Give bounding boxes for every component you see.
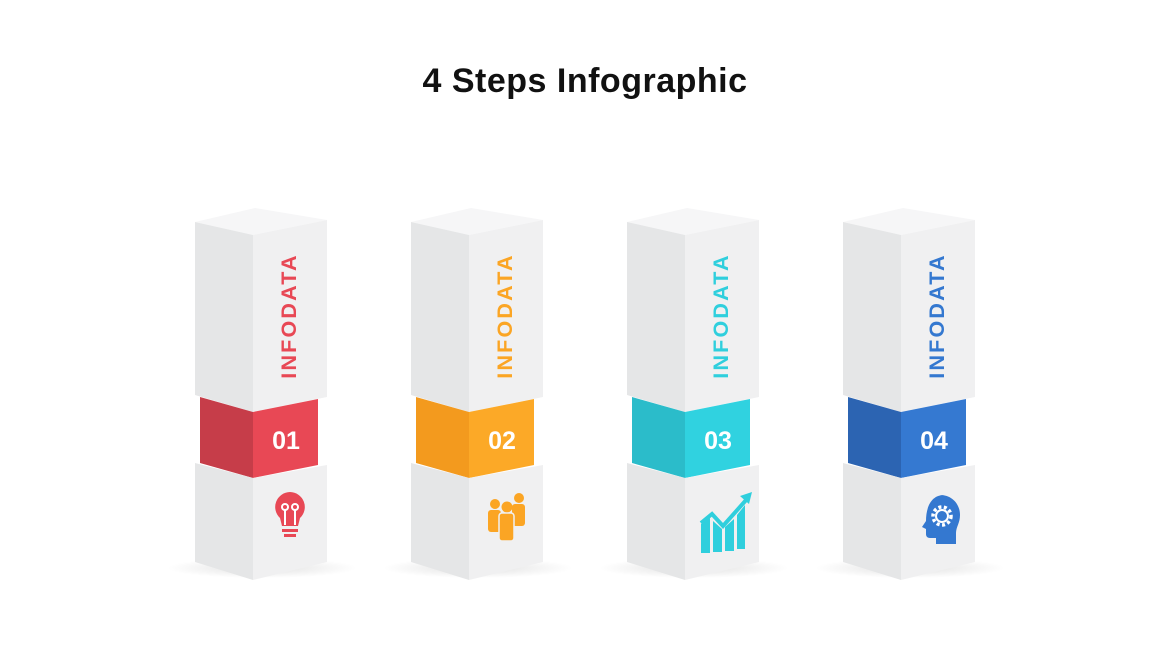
column 1 xyxy=(167,208,357,580)
icon: head with gear xyxy=(922,495,960,544)
column 4 xyxy=(815,208,1005,580)
upper block xyxy=(411,208,543,412)
band 02: 02 xyxy=(488,427,516,455)
icon: growth chart xyxy=(701,492,752,553)
lower block xyxy=(195,463,327,580)
upper block xyxy=(843,208,975,412)
label: INFODATA: INFODATA xyxy=(277,253,301,379)
band 03 xyxy=(632,397,750,478)
band 04: 04 xyxy=(920,427,948,455)
label: INFODATA: INFODATA xyxy=(925,253,949,379)
icon: people xyxy=(488,493,525,541)
band 04 xyxy=(848,397,966,478)
lower block xyxy=(843,463,975,580)
lower block xyxy=(627,463,759,580)
band 03: 03 xyxy=(704,427,732,455)
band 01 xyxy=(200,397,318,478)
column 3 xyxy=(599,208,789,580)
label: INFODATA: INFODATA xyxy=(709,253,733,379)
title: 4 Steps Infographic xyxy=(422,62,748,100)
icon: lightbulb xyxy=(275,492,305,537)
lower block xyxy=(411,463,543,580)
label: INFODATA: INFODATA xyxy=(493,253,517,379)
column 2 xyxy=(383,208,573,580)
band 01: 01 xyxy=(272,427,300,455)
upper block xyxy=(627,208,759,412)
band 02 xyxy=(416,397,534,478)
upper block xyxy=(195,208,327,412)
